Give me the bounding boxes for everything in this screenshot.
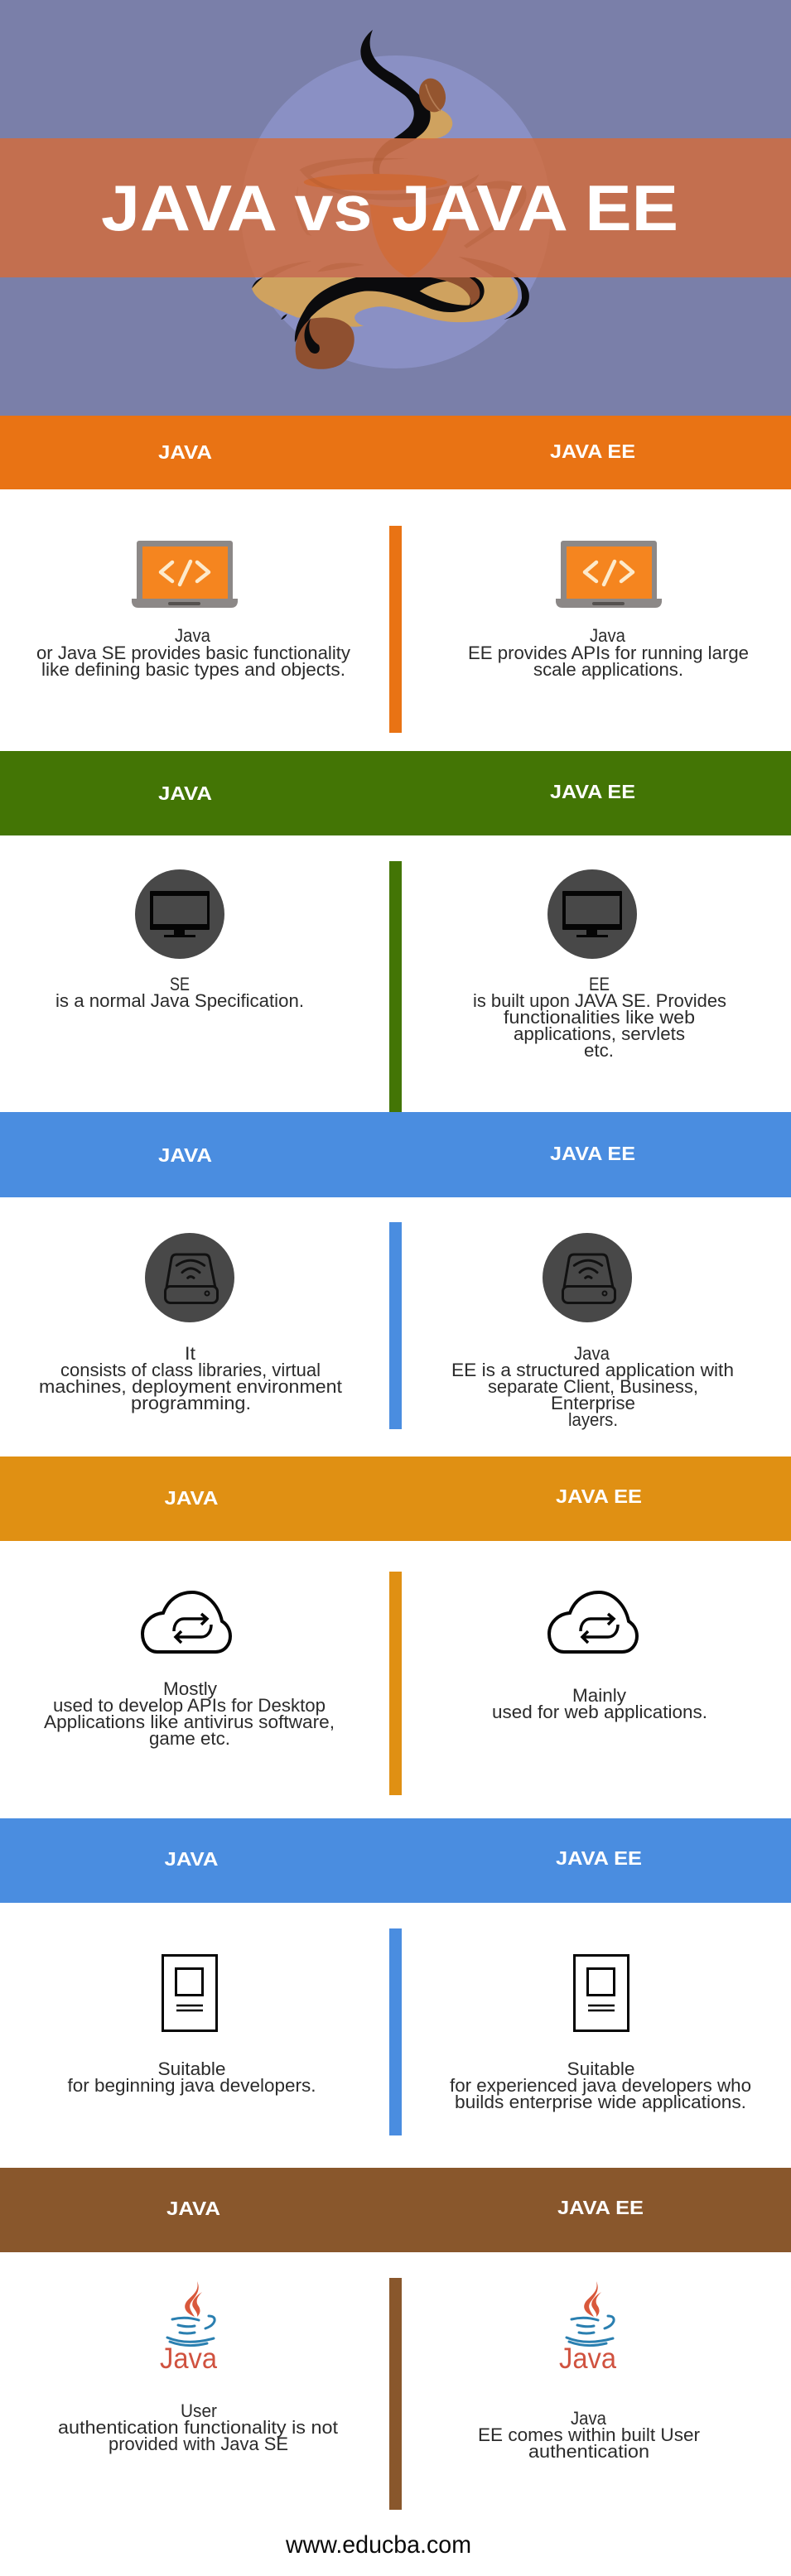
- text: java row 5: Suitable: [157, 2058, 225, 2079]
- text: java row 1: like defining basic types and objects.: [41, 659, 345, 680]
- text: java ee row 1: [468, 625, 749, 680]
- panel: row 3 header: JAVA EE: [550, 1143, 635, 1164]
- icon: java logo right: [559, 2281, 616, 2375]
- title: JAVA vs JAVA EE: [101, 171, 678, 244]
- icon: document right: [575, 1956, 628, 2030]
- text: java row 3: [39, 1343, 342, 1413]
- panel: row 2 header: JAVA: [158, 782, 212, 804]
- text: java ee row 6: [478, 2408, 700, 2462]
- text: java row 4: used to develop APIs for Desktop: [53, 1695, 326, 1716]
- text: java ee row 6: EE comes within built User: [478, 2424, 700, 2445]
- icon: wireless drive right: [543, 1233, 632, 1322]
- divider: row 1: [389, 526, 402, 733]
- text: java row 2: SE: [170, 974, 190, 994]
- text: java ee row 3: Enterprise: [551, 1393, 635, 1413]
- panel: row 1 header: [0, 416, 791, 489]
- text: java ee row 3: separate Client, Business,: [488, 1376, 698, 1397]
- divider: row 3: [389, 1222, 402, 1429]
- icon: java logo left: Java: [160, 2342, 217, 2375]
- icon: wireless drive left: [145, 1233, 234, 1322]
- text: java ee row 3: layers.: [568, 1409, 618, 1430]
- panel: row 1 header: JAVA EE: [550, 441, 635, 462]
- panel: row 5 header: [0, 1818, 791, 1903]
- text: java row 1: Java: [175, 625, 211, 646]
- icon: laptop code left: [132, 541, 238, 608]
- divider: row 2: [389, 861, 402, 1112]
- text: java ee row 2: functionalities like web: [504, 1007, 695, 1028]
- panel: row 6 header: JAVA EE: [557, 2197, 644, 2218]
- icon: java logo left: [160, 2281, 217, 2375]
- panel: row 2 header: [0, 751, 791, 835]
- text: java ee row 2: etc.: [584, 1040, 614, 1061]
- text: java row 5: [68, 2058, 316, 2096]
- circle backdrop: [241, 55, 551, 368]
- text: java row 4: game etc.: [149, 1728, 230, 1749]
- panel: row 1 header: JAVA: [158, 441, 212, 463]
- text: java ee row 1: EE provides APIs for running large: [468, 643, 749, 663]
- text: java ee row 1: scale applications.: [533, 659, 683, 680]
- text: java row 6: provided with Java SE: [109, 2434, 288, 2454]
- illustration: coffee cup with steam: [252, 30, 529, 369]
- text: java row 6: [58, 2400, 338, 2454]
- text: java ee row 3: [451, 1343, 734, 1430]
- text: java ee row 2: is built upon JAVA SE. Provides: [473, 990, 726, 1011]
- panel: hero header: [0, 0, 791, 416]
- panel: row 3 header: [0, 1112, 791, 1197]
- text: java ee row 4: [492, 1685, 707, 1722]
- text: java ee row 3: EE is a structured application with: [451, 1360, 734, 1380]
- divider: row 5: [389, 1928, 402, 2135]
- icon: monitor left: [135, 869, 224, 959]
- icon: java logo right: Java: [559, 2342, 616, 2375]
- title band: [0, 138, 791, 277]
- panel: row 4 header: JAVA: [164, 1487, 219, 1509]
- text: java row 5: for beginning java developers.: [68, 2075, 316, 2096]
- text: java row 3: programming.: [131, 1393, 251, 1413]
- text: java ee row 5: for experienced java developers who: [450, 2075, 751, 2096]
- icon: document left: [162, 1956, 217, 2030]
- panel: row 6 header: [0, 2168, 791, 2252]
- divider: row 4: [389, 1572, 402, 1795]
- text: java ee row 4: used for web applications.: [492, 1702, 707, 1722]
- text: java row 1: or Java SE provides basic functionality: [36, 643, 350, 663]
- panel: row 6 header: JAVA: [166, 2198, 220, 2219]
- text: java ee row 2: EE: [589, 974, 610, 994]
- text: java row 6: authentication functionality is not: [58, 2417, 338, 2438]
- text: java ee row 5: [450, 2058, 751, 2112]
- text: java row 3: consists of class libraries, virtual: [60, 1360, 321, 1380]
- text: java row 2: is a normal Java Specification.: [55, 990, 304, 1011]
- panel: row 5 header: JAVA: [164, 1848, 219, 1870]
- icon: cloud sync left: [142, 1592, 230, 1652]
- text: java ee row 6: Java: [571, 2408, 607, 2429]
- icon: cloud sync right: [549, 1592, 637, 1652]
- text: java row 4: Mostly: [163, 1678, 217, 1699]
- divider: row 6: [389, 2278, 402, 2510]
- footer url: www.educba.com: [285, 2531, 471, 2559]
- text: java ee row 4: Mainly: [572, 1685, 626, 1706]
- panel: row 2 header: JAVA EE: [550, 781, 635, 802]
- icon: laptop code right: [556, 541, 662, 608]
- text: java row 4: [44, 1678, 335, 1749]
- text: java ee row 1: Java: [590, 625, 626, 646]
- panel: row 4 header: JAVA EE: [556, 1485, 642, 1507]
- text: java row 4: Applications like antivirus software,: [44, 1712, 335, 1732]
- panel: row 3 header: JAVA: [158, 1144, 212, 1166]
- text: java ee row 6: authentication: [528, 2441, 649, 2462]
- text: java row 1: [36, 625, 350, 680]
- text: java ee row 2: [473, 974, 726, 1061]
- text: java ee row 5: builds enterprise wide applications.: [455, 2092, 746, 2112]
- text: java ee row 2: applications, servlets: [514, 1023, 685, 1044]
- panel: row 5 header: JAVA EE: [556, 1847, 642, 1869]
- text: java ee row 5: Suitable: [567, 2058, 634, 2079]
- text: java row 6: User: [181, 2400, 217, 2421]
- text: java row 3: machines, deployment environment: [39, 1376, 342, 1397]
- text: java ee row 3: Java: [574, 1343, 610, 1364]
- icon: monitor right: [547, 869, 637, 959]
- text: java row 3: It: [185, 1343, 195, 1364]
- text: java row 2: [55, 974, 304, 1011]
- panel: row 4 header: [0, 1457, 791, 1541]
